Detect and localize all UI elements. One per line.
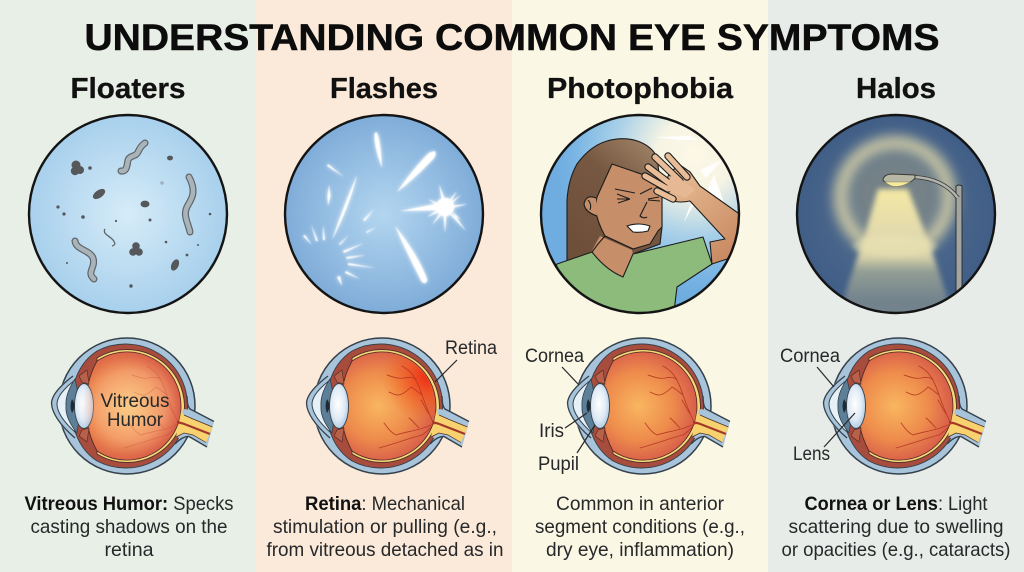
illustration: flashes view <box>285 115 483 313</box>
labels: cornea, iris, pupil: Iris <box>539 421 564 442</box>
label: retina: Retina <box>445 338 497 359</box>
description: halos: Cornea or Lens: Light <box>804 493 988 515</box>
labels: cornea, iris, pupil <box>525 346 595 475</box>
description: photophobia: segment conditions (e.g., <box>535 516 745 538</box>
label: vitreous humor: Vitreous <box>100 391 170 412</box>
description: floaters <box>24 493 234 561</box>
description: flashes <box>266 493 504 561</box>
diagram: eye with vitreous humor <box>52 338 214 474</box>
labels: cornea, iris, pupil: Cornea <box>525 346 584 367</box>
description: floaters: retina <box>104 539 154 561</box>
description: flashes: Retina: Mechanical <box>305 493 465 515</box>
heading: photophobia: Photophobia <box>547 73 734 105</box>
description: floaters: Vitreous Humor: Specks <box>24 493 234 515</box>
diagram: eye with cornea and lens labels <box>824 338 986 474</box>
description: halos: scattering due to swelling <box>788 516 1004 538</box>
description: photophobia <box>535 493 745 561</box>
illustration: floaters view <box>29 115 227 313</box>
diagram: eye with anterior segment labels <box>568 338 730 474</box>
illustration: street lamp with halo <box>797 115 995 320</box>
labels: cornea, lens: Lens <box>793 444 830 465</box>
panel: photophobia <box>525 73 745 561</box>
label: vitreous humor <box>100 391 170 431</box>
label: vitreous humor: Humor <box>107 410 164 431</box>
title: UNDERSTANDING COMMON EYE SYMPTOMS <box>84 16 939 58</box>
diagram: eye with retina highlighted <box>306 338 469 474</box>
labels: cornea, iris, pupil: Pupil <box>538 454 579 475</box>
description: halos <box>782 493 1010 561</box>
description: halos: or opacities (e.g., cataracts) <box>782 539 1010 561</box>
description: flashes: from vitreous detached as in <box>266 539 504 561</box>
heading: floaters: Floaters <box>70 73 186 105</box>
illustration: woman shielding eyes from sun <box>540 115 745 320</box>
heading: halos: Halos <box>856 73 936 105</box>
description: photophobia: dry eye, inflammation) <box>546 539 734 561</box>
panel: halos <box>780 73 1010 561</box>
panel: flashes <box>266 73 504 561</box>
labels: cornea, lens: Cornea <box>780 346 840 367</box>
description: photophobia: Common in anterior <box>556 493 724 515</box>
description: floaters: casting shadows on the <box>30 516 228 538</box>
description: flashes: stimulation or pulling (e.g., <box>273 516 497 538</box>
heading: flashes: Flashes <box>330 73 438 105</box>
label: retina <box>435 338 497 382</box>
labels: cornea, lens <box>780 346 855 465</box>
panel: floaters <box>24 73 234 561</box>
